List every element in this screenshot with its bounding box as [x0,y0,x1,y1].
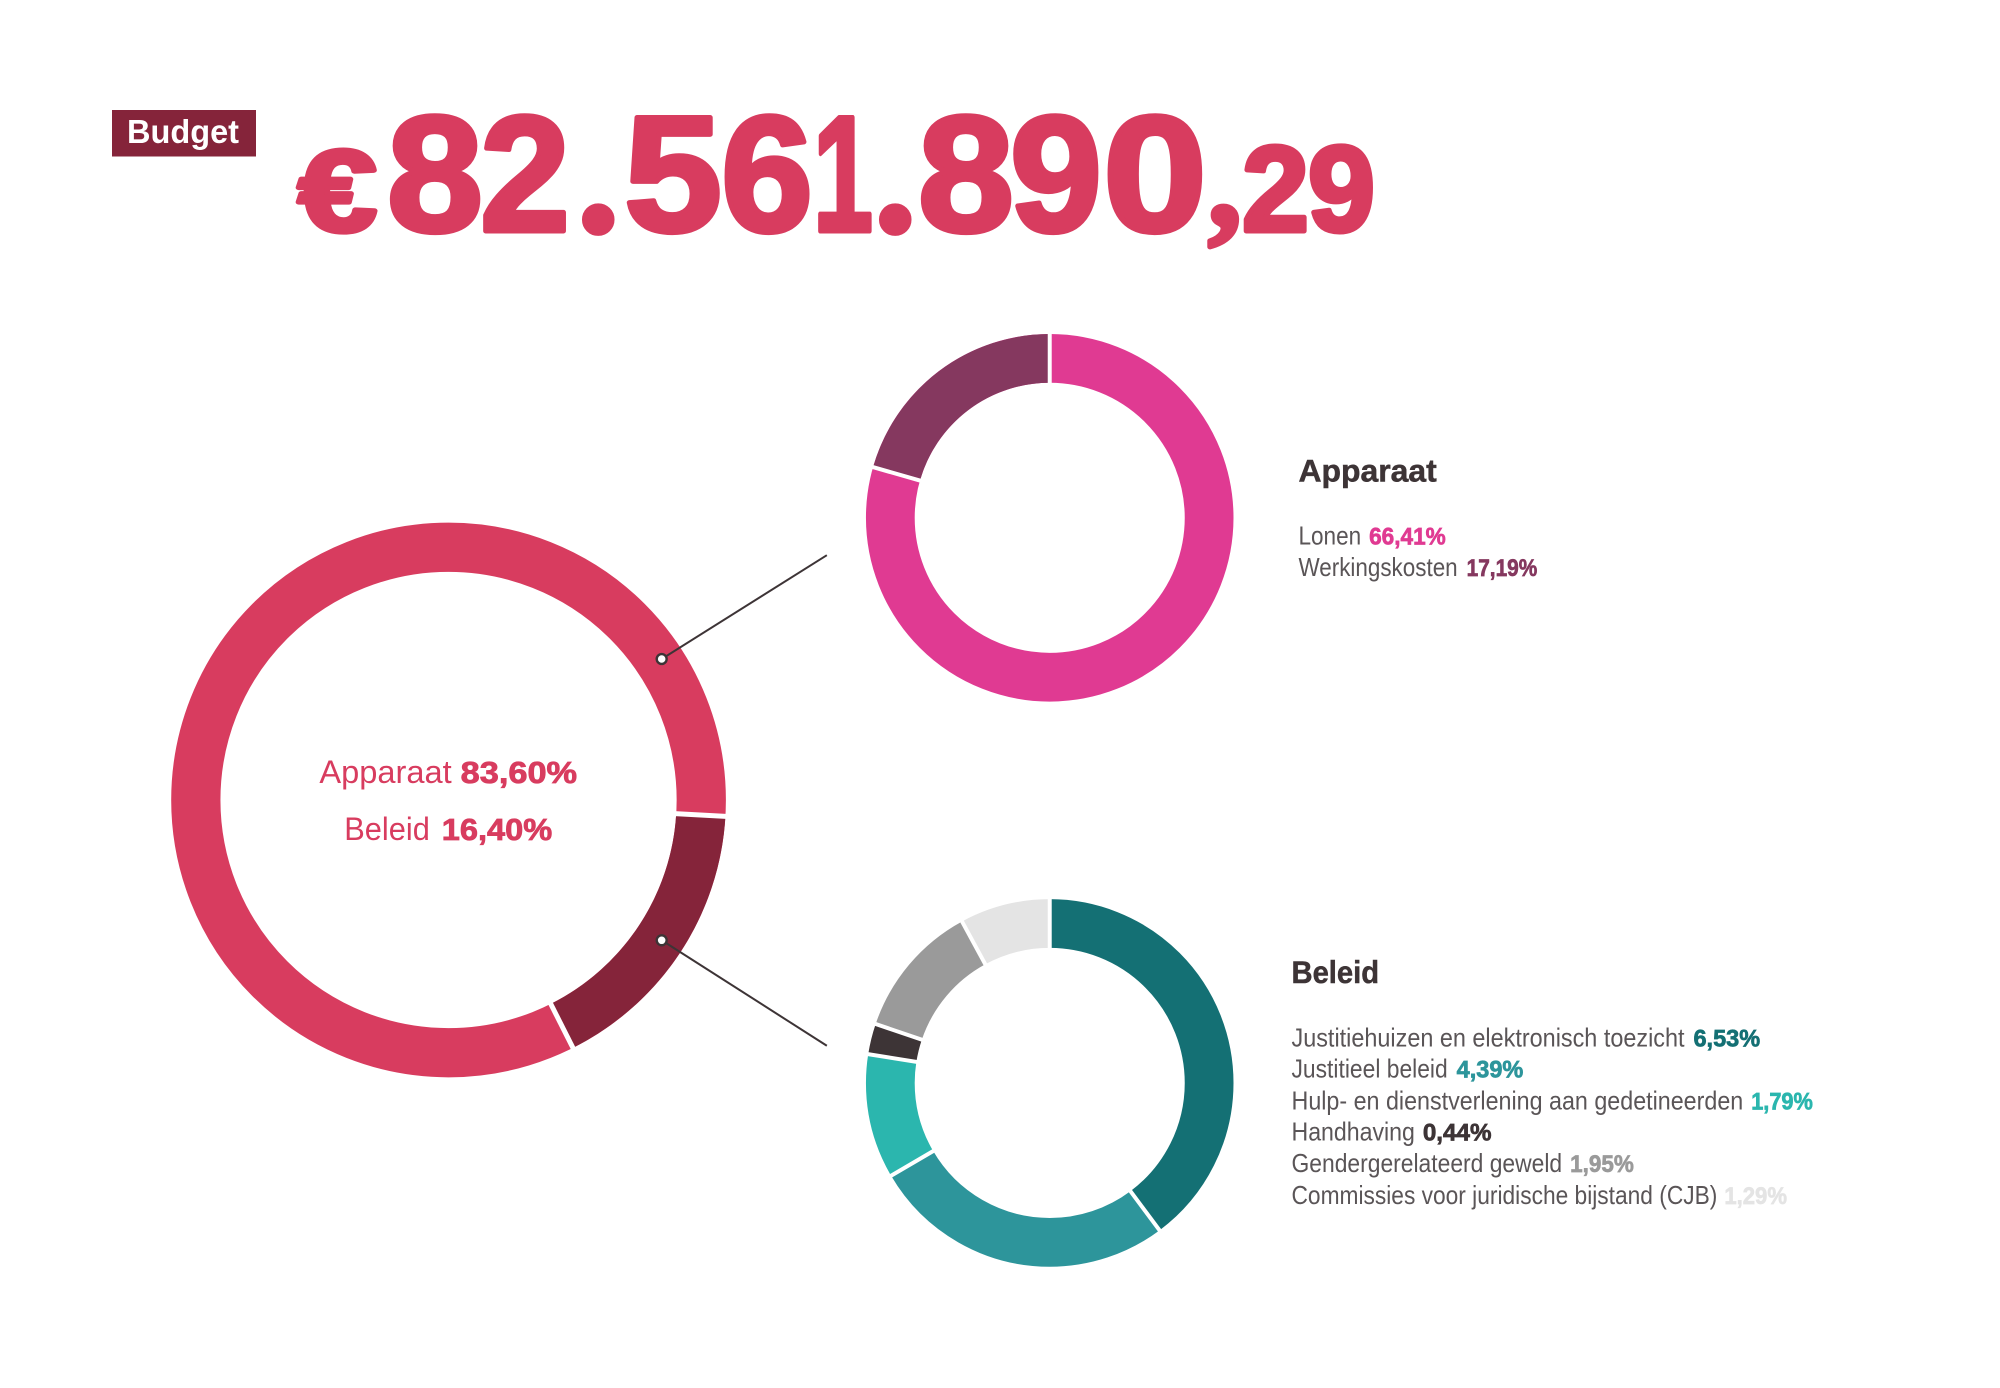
title: total budget amount: 8 [387,82,483,266]
Beleid legend: 6,53% [1693,1026,1760,1053]
Beleid legend: Handhaving [1292,1118,1415,1146]
main split labels: 16,40% [442,812,552,847]
title: total budget amount: . [577,80,620,268]
Apparaat legend: Apparaat [1298,453,1437,489]
main split labels: Apparaat [319,753,452,790]
title: total budget amount: , [1208,107,1242,256]
Apparaat legend: Lonen [1298,522,1361,550]
title: total budget amount: 9 [1308,121,1375,257]
Beleid legend: Hulp- en dienstverlening aan gedetineerden [1292,1087,1743,1115]
title: total budget amount: 2 [1242,121,1309,257]
title: total budget amount: 1 [813,82,873,266]
budget label [112,110,256,156]
donut chart: main split [181,533,730,1067]
Beleid legend: Beleid [1292,954,1379,990]
main split labels: Beleid [344,810,430,847]
main split labels [319,753,577,847]
Apparaat legend: 66,41% [1369,523,1446,550]
Beleid legend: 1,95% [1570,1151,1634,1178]
Apparaat legend: Werkingskosten [1298,554,1458,582]
main split labels: 83,60% [461,755,577,790]
Apparaat legend [1298,453,1537,582]
title: total budget amount: 0 [1103,82,1207,266]
Beleid legend: Justitieel beleid [1292,1056,1448,1084]
Apparaat legend: 17,19% [1467,555,1537,582]
budget label: Budget [127,113,239,150]
Beleid legend [1292,954,1813,1210]
connector: Beleid [657,935,827,1046]
charts and legends [181,321,1813,1242]
Beleid legend: 0,44% [1423,1119,1492,1146]
connector: Apparaat [657,555,827,664]
title: total budget amount: . [874,80,916,268]
donut chart: Beleid [864,895,1209,1242]
title: total budget amount: 8 [918,82,1014,266]
Beleid legend: Commissies voor juridische bijstand (CJB) [1292,1182,1717,1210]
title: total budget amount: 9 [1010,82,1102,266]
Beleid legend: 1,79% [1751,1088,1813,1115]
title: total budget amount [298,80,1375,268]
Beleid legend: 1,29% [1724,1183,1787,1210]
title: total budget amount: 5 [624,82,722,266]
Beleid legend: Gendergerelateerd geweld [1292,1150,1562,1178]
Beleid legend: 4,39% [1457,1057,1523,1084]
donut chart: Apparaat [853,321,1247,715]
title: total budget amount: € [298,126,377,256]
title: total budget amount: 2 [480,82,570,266]
title: total budget amount: 6 [721,82,813,266]
Beleid legend: Justitiehuizen en elektronisch toezicht [1292,1025,1685,1053]
